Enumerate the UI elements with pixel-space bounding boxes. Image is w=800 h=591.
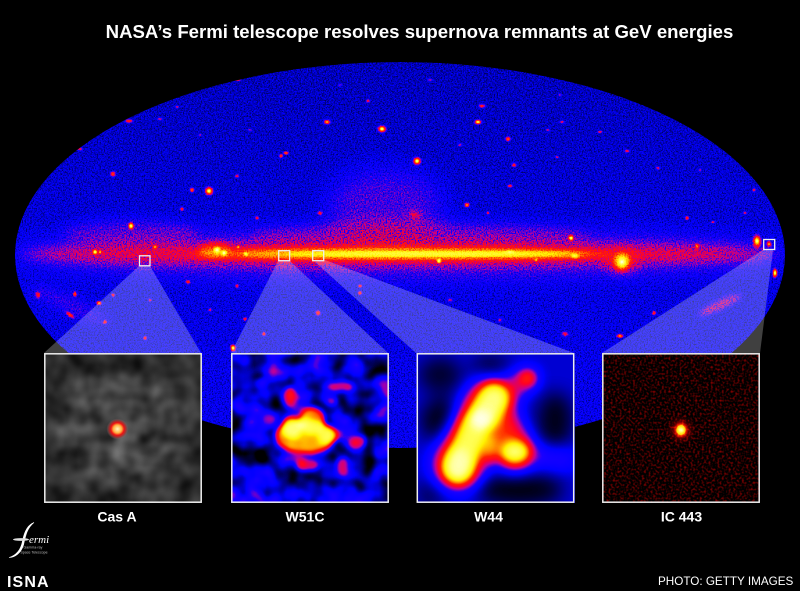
- logo: Fermi Gamma-ray Space Telescope: [9, 522, 49, 558]
- inset label: IC 443: IC 443: [661, 508, 702, 524]
- Cas A source: [106, 418, 128, 440]
- inset panel: W51C: [231, 353, 389, 503]
- zoom cone: IC 443: [602, 250, 773, 353]
- locator boxes on the map: [140, 240, 775, 266]
- photo credit: PHOTO: GETTY IMAGES: [658, 575, 794, 588]
- logo: Fermi Gamma-ray Space Telescope: Gamma-ray: [24, 546, 43, 550]
- zoom cone: W44: [315, 260, 574, 353]
- ISNA wordmark: ISNA: [7, 574, 50, 591]
- logo: Fermi Gamma-ray Space Telescope: ermi: [29, 534, 49, 546]
- title: NASA’s Fermi telescope resolves supernova remnants at GeV energies: [106, 21, 733, 42]
- diffuse haze: [15, 167, 785, 331]
- zoom cone: W51C: [231, 261, 388, 353]
- galactic plane: [15, 242, 785, 262]
- inset panel: IC 443: [602, 353, 760, 503]
- point sources: [34, 78, 778, 353]
- inset label: W44: W44: [474, 508, 503, 524]
- all-sky gamma-ray map: [0, 50, 800, 460]
- inset label: Cas A: Cas A: [97, 508, 137, 524]
- inset panel: W44: [417, 353, 575, 509]
- inset panel: Cas A: [44, 353, 202, 503]
- logo: Fermi Gamma-ray Space Telescope: Space Telescope: [20, 550, 48, 554]
- inset label: W51C: W51C: [286, 508, 324, 524]
- zoom cone: Cas A: [44, 266, 201, 353]
